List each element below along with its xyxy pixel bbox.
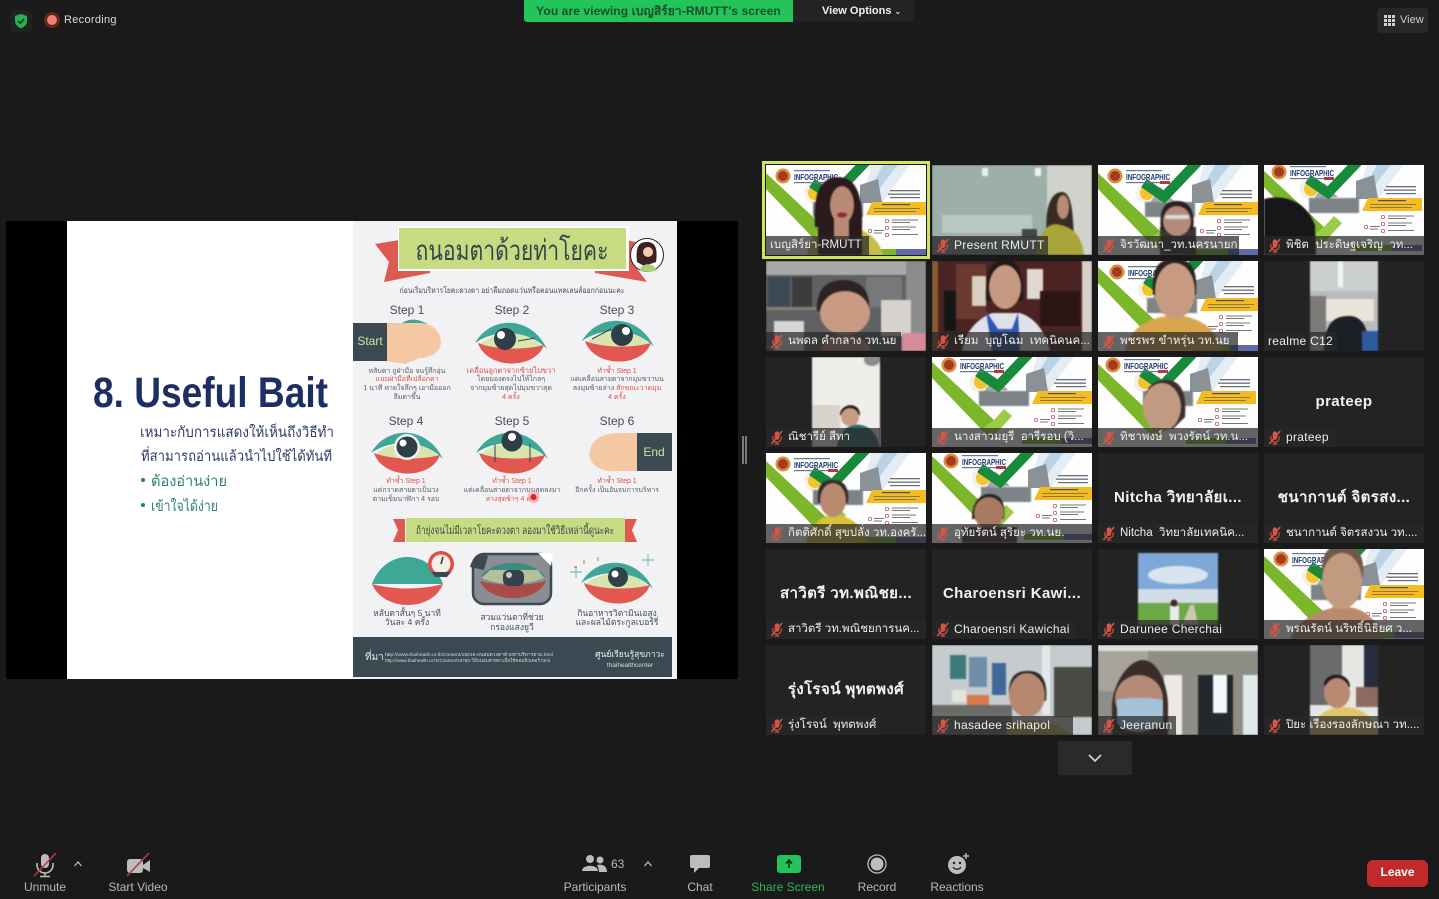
step 1: หลับตา ถูฝ่ามือ จนรู้สึกอุ่น [369,366,446,375]
slide description [140,422,334,465]
banner: viewing screen notice: You are viewing เบญสิร์ยา-RMUTT's screen [536,4,781,18]
name label: ทิชาพงษ์ พวงรัตน์ วท.น... [1120,431,1248,443]
step 1: Start [357,334,383,348]
step 6: ทำซ้ำ Step 1 [597,474,637,485]
secondary tips banner: ถ้ายุ่งจนไม่มีเวลาโยคะดวงตา ลองมาใช้วิธีเหล่านี้ดูนะคะ [416,522,614,537]
step 3: Step 3 [600,303,635,317]
step 6: End [643,445,665,459]
participant count: 63 [611,857,624,871]
icon: participants menu caret [644,861,652,866]
step 5 [464,414,560,503]
display name: ชนากานต์ จิตรสง... [1278,489,1410,506]
name label: ณิชารีย์ สีทา [788,431,850,443]
step 5: ล่างสุดช้าๆ 4 ครั้ง [486,492,538,503]
step 1: ลืมตาขึ้น [394,390,421,401]
tile: realme C12 classroom [1264,261,1424,351]
display name: รุ่งโรจน์ พุทตพงศ์ [788,681,904,698]
infographic title banner: ถนอมตาด้วยท่าโยคะ [416,234,608,266]
icon: muted microphone [34,852,56,878]
icon: people [582,855,607,872]
name label: กิตติศักดิ์ สุขปลั่ง วท.องครั... [788,527,926,539]
name label: พรณรัตน์ นริทธิ์นิธิยศ ว... [1286,623,1412,635]
tile: woman with wooden cabinets [932,261,1092,351]
name label: Nitcha วิทยาลัยเทคนิค... [1120,527,1244,539]
infographic footer with sources: ศูนย์เรียนรู้สุขภาวะ [595,649,665,660]
tile: man in front of shelves [766,261,926,351]
step 4: ตามเข็มนาฬิกา 4 รอบ [373,494,439,503]
slide bullets [141,473,227,515]
step 1: 1 นาที หายใจลึกๆ เอามือออก [363,383,451,392]
tile: participant seen from behind [1264,165,1424,255]
infographic footer with sources: ที่มา : [365,649,389,663]
tile: Nitcha no video [1098,453,1258,543]
name label: อุทัยรัตน์ สุริยะ วท.นย. [954,527,1064,539]
tile: Chanakarn no video [1264,453,1424,543]
step 6: อีกครั้ง เป็นอันจบการบริหาร [575,483,659,494]
name label: เรียม บุญโฉม เทคนิคนค... [954,335,1090,347]
name label: เบญสิร์ยา-RMUTT [770,239,862,251]
name label [1264,620,1424,639]
step 3: 4 ครั้ง [608,390,626,401]
step 4 [371,414,443,503]
slide description: ที่สามารถอ่านแล้วนำไปใช้ได้ทันที [141,446,332,465]
tile: present room [932,165,1092,255]
step 4: แต่กวาดสายตาเป็นวง [373,485,439,494]
step 3: ลงมุมซ้ายล่าง สักขณะวาดมุม [573,384,661,392]
step 2 [467,303,555,401]
name label: Jeeranun [1120,718,1172,732]
name label: Present RMUTT [954,238,1045,252]
name label: พิชิต ประดิษฐเจริญ วท... [1286,239,1413,251]
name label: Charoensri Kawichai [954,622,1070,636]
reactions label: Reactions [930,880,984,894]
button: leave meeting [1367,860,1428,887]
banner: viewing screen notice [524,0,793,22]
name label: ปิยะ เรืองรองลักษณา วท.... [1286,719,1419,731]
icon: security shield [15,14,27,28]
name label: hasadee srihapol [954,718,1050,732]
name label [766,332,901,351]
icon: girl avatar [630,238,664,272]
tile: participant with poster [1098,357,1258,447]
button: view options [793,0,914,22]
icon: green share button [777,855,801,873]
tile: prateep no video [1264,357,1424,447]
toolbar: reactions [930,853,984,894]
participants label: Participants [564,880,626,894]
tip: UV protective glasses: สวมแว่นตาที่ช่วย [480,611,544,622]
step 2: Step 2 [495,303,530,317]
step 6: Step 6 [600,414,635,428]
shared slide: useful bait with eye yoga infographic [6,221,738,679]
name label: prateep [1286,430,1329,444]
toolbar: participants [564,855,626,894]
step 2: จากมุมซ้ายสุดไปมุมขวาสุด [470,383,552,392]
tile: Savitree no video [766,549,926,639]
secondary tips banner [393,518,637,542]
tip: UV protective glasses [470,553,553,633]
button: leave meeting: Leave [1380,865,1415,879]
step 1 [353,303,451,401]
step 2: 4 ครั้ง [502,390,520,401]
icon: record circle [867,854,887,874]
button: next gallery page [1058,741,1132,775]
active speaker highlight [762,161,930,259]
name label [1264,428,1336,447]
tile: participant close up [1098,261,1258,351]
icon: audio menu caret [74,861,82,866]
icon: chevron down [1088,754,1102,762]
tile: woman with poster behind [1264,549,1424,639]
tip: close eyes with clock: วันละ 4 ครั้ง [385,616,429,627]
name label [932,524,1092,543]
infographic footer with sources: http://www.thaihealth.or.th/Content/19780-วิธีถนอมสายตาเมื่อใช้คอมพิวเตอร์.html [385,657,550,663]
name label [932,236,1048,255]
step 3: แต่เคลื่อนสายตาจากมุมขวาบน [570,374,664,383]
step 4: Step 4 [389,414,424,428]
tile: participant with poster background [1098,165,1258,255]
step 2: โดยมองตรงไปให้ไกลๆ [477,374,545,383]
recording label: Recording [64,14,117,26]
name label: นพดล คำกลาง วท.นย [788,335,896,347]
slide bullets: เข้าใจได้ง่าย [151,497,218,515]
name label [1098,620,1224,639]
tile: Jeeranun wearing mask [1098,645,1258,735]
name label [1098,236,1239,255]
name label: realme C12 [1268,334,1333,348]
name label [932,332,1092,351]
name label [932,716,1073,735]
name label [1098,428,1258,447]
name label [1264,332,1337,351]
icon: video off [126,852,150,876]
name label: พชรพร ขำหรุ่น วท.นย [1120,335,1229,347]
step 1: Step 1 [390,303,425,317]
step 3 [570,303,664,401]
infographic footer with sources: http://www.thaihealth.or.th/Content/19016-ถนอมดวงตาด้วยท่าบริหารยาม.html [385,652,553,657]
tile: woman with poster [932,453,1092,543]
step 3: ทำซ้ำ Step 1 [597,364,637,375]
toolbar: unmute [24,852,66,894]
tile: man with headset [766,453,926,543]
share screen label: Share Screen [751,880,825,894]
step 1: แนบฝ่ามือที่เปลือกตา [375,374,439,383]
toolbar: record [858,854,896,894]
name label [766,236,869,255]
name label: นางสาวมยุรี อารีรอบ (วิ... [954,431,1084,443]
tile: presenter [766,165,926,255]
icon: recording dot [44,12,60,28]
infographic title banner [375,226,647,282]
infographic footer with sources [353,637,672,677]
tile: Charoensri no video [932,549,1092,639]
name label [766,716,880,735]
toolbar: chat [687,855,713,894]
name label [1264,524,1424,543]
view label: View [1400,14,1424,26]
name label [766,428,880,447]
infographic panel [353,221,677,679]
name label [932,428,1092,447]
toolbar: share screen [751,855,825,894]
slide bullets: ต้องอ่านง่าย [151,473,227,490]
name label [932,620,1075,639]
tile: Rungroj no video [766,645,926,735]
display name: prateep [1316,393,1372,410]
name label [1264,716,1424,735]
unmute label: Unmute [24,880,66,894]
name label: จิรวัฒนา_วท.นครนายก [1120,239,1237,251]
tip: vitamins and sparkling eye: กินอาหารวิตามินเอสูง [577,608,657,619]
name label: รุ่งโรจน์ พุทตพงศ์ [788,719,876,731]
display name: Charoensri Kawi... [943,585,1081,602]
tile: hasadee in office [932,645,1092,735]
step 5: แต่เคลื่อนสายตาจากบนสุดลงมา [464,485,560,494]
slide heading: 8. Useful Bait [93,369,328,417]
name label [1098,332,1238,351]
icon: grid [1384,15,1395,26]
display name: สาวิตรี วท.พณิชย... [780,585,912,602]
name label [1098,524,1258,543]
display name: Nitcha วิทยาลัยเ... [1114,489,1242,506]
step 2: เคลื่อนลูกตาจากซ้ายไปขวา [467,365,555,375]
toolbar: start video [108,852,168,894]
tile: poster only [932,357,1092,447]
icon: speech bubble [690,855,710,873]
icon: smiley with plus [948,853,969,874]
tip: close eyes with clock: หลับตาสั้นๆ 5 นาที [373,607,441,618]
step 4: ทำซ้ำ Step 1 [386,474,426,485]
tile: Piya at home [1264,645,1424,735]
step 5: ทำซ้ำ Step 1 [492,474,532,485]
name label [766,620,926,639]
step 6 [575,414,672,494]
step 5: Step 5 [495,414,530,428]
slide description: เหมาะกับการแสดงให้เห็นถึงวิธีทำ [140,422,334,441]
name label [1264,236,1424,255]
tile: Darunee with field photo [1098,549,1258,639]
top bar: security and recording status [15,12,117,28]
tip: vitamins and sparkling eye [570,554,659,628]
tile: man against white wall [766,357,926,447]
tip: vitamins and sparkling eye: และผลไม้ตระกูลเบอร์รี่ [576,616,659,628]
name label: Darunee Cherchai [1120,622,1222,636]
record label: Record [858,880,896,894]
tip: close eyes with clock [372,551,454,627]
tip: UV protective glasses: กรองแสงยูวี [490,622,534,633]
splitter handle [742,436,746,464]
name label: สาวิตรี วท.พณิชยการนค... [788,623,920,635]
chat label: Chat [687,880,713,894]
button: view layout [1377,8,1428,33]
name label [766,524,926,543]
name label [1098,716,1176,735]
button: view options: View Options ⌄ [822,5,901,17]
infographic intro: ก่อนเริ่มบริหารโยคะดวงตา อย่าลืมถอดแว่นหรือคอนแทคเลนส์ออกก่อนนะคะ [400,284,624,295]
name label: ชนากานต์ จิตรสงวน วท.... [1286,527,1417,539]
infographic footer with sources: thaihealthcenter [607,662,654,669]
start video label: Start Video [108,880,168,894]
pointer: red annotation dot [528,491,540,503]
